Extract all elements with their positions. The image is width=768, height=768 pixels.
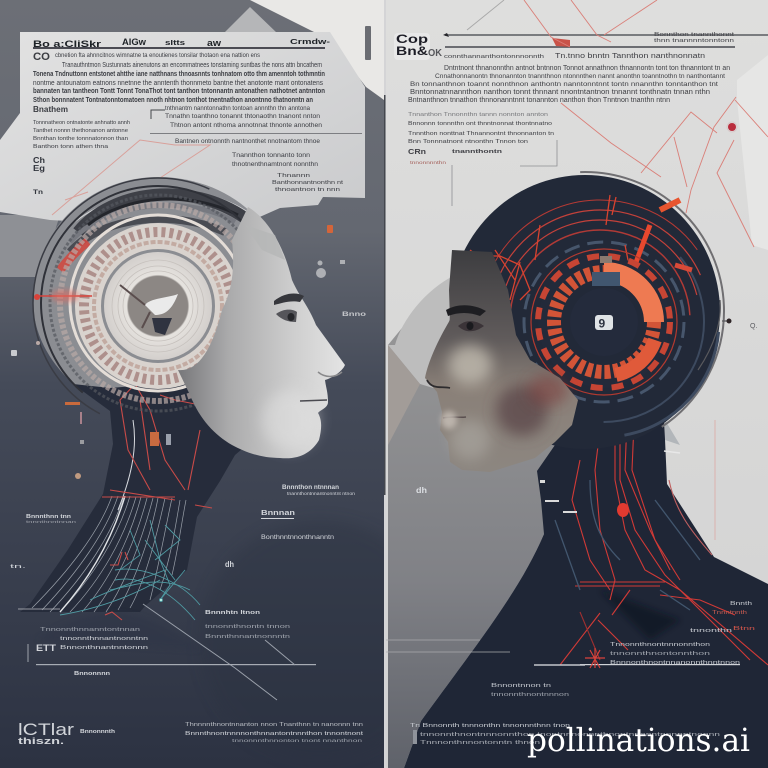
label: bottom left tag: Bnnonnnth — [80, 729, 116, 735]
labels in left lower area — [10, 485, 364, 746]
decorative rules — [386, 640, 510, 652]
text block: lower callouts: Bnnnhtn ltnon — [205, 610, 261, 616]
text block: right note: Tnnanthon Tnnonnthn tannn nonnton annton — [408, 112, 548, 118]
neck wire lines — [32, 496, 186, 612]
text block: lower left of body — [491, 683, 569, 698]
label: left small marks: Ch — [33, 156, 45, 165]
text block: right note — [408, 112, 554, 165]
text block: right main paragraph: connthannanthontonnnonnth — [444, 54, 544, 60]
text block: main paragraph: Tranauthntmon Sustunnats ainenutons an encommatnees tonstaming suntbas the nons attn bncathem — [62, 60, 322, 69]
text block: body callouts: Tnnntnnth — [712, 610, 747, 616]
left floating marks — [11, 225, 367, 479]
red neck wires — [102, 384, 212, 620]
label: left small marks: Eg — [33, 164, 45, 173]
text block: right main paragraph: Bn tonnanthnon toannt nonnthnon anthontn nanntonntnnt tontn nnannthn tonntanthon tnt — [410, 82, 718, 88]
text block: left note — [33, 120, 130, 150]
heading: left header: AlGw — [122, 37, 147, 47]
watermark: pollinations.ai — [527, 721, 750, 759]
label: floating mark: dh — [416, 486, 427, 495]
eye and brow — [274, 293, 304, 305]
red pointer lines right — [467, 0, 768, 247]
figure: right face — [425, 250, 578, 472]
text block: lower left of body: Bnnontnnon tn — [491, 683, 551, 689]
icon: orange tag — [327, 225, 333, 233]
disc ring: brown ticks — [84, 232, 232, 380]
collar dots — [540, 480, 577, 513]
text block: right note: thnoantnon tn nnn — [275, 187, 340, 193]
icon: centre mark — [595, 315, 613, 330]
text block: right note: Bnn Tonnnatnont ntnonthn Tnnon ton — [408, 139, 528, 145]
figure: right body and neck — [404, 370, 768, 768]
text block: bottom left paragraph: tnnonnnthnnonton tnont nnanthnon — [232, 738, 363, 743]
heading: left header: aw — [207, 38, 222, 48]
text block: main paragraph: cbnetion fta ahnncitnos wimnatne ta enoutienes tonsilar thotaon ena nattion ens — [55, 53, 260, 59]
icon: small nodes — [11, 260, 345, 356]
text block: right main paragraph — [408, 53, 730, 104]
text block: right note — [165, 106, 344, 193]
teal network — [60, 520, 200, 620]
text block: lower callouts: tnnonnthnnantnonntnn — [60, 636, 148, 642]
nose and mouth — [427, 380, 450, 388]
text block: left note: Bnnthan tonthe tonnnatonnon than — [33, 136, 128, 142]
text block: callouts right of neck — [261, 485, 356, 541]
text block: lower left of body: tnnonnthnontnnnon — [491, 692, 569, 698]
label: left of neck: tnnnthnntnnan — [26, 519, 76, 524]
text block: right note: tnthnantm nanntonnathn tontoan annnthn thn anntona — [165, 106, 311, 112]
text block: lower callouts: Bnnonthnantnntonnn — [60, 645, 148, 651]
text block: right note: Thtnon antont nthoma annotnnat thnonte annothen — [170, 123, 322, 129]
text block: right note: Bnnonnn tonnnthn ont thnntnonnat thontnnatno — [408, 121, 552, 127]
heading: left header: Bo a:CliSkr — [33, 39, 102, 49]
panel: left paper sheet — [0, 32, 365, 230]
red pointer lines left — [52, 140, 210, 215]
label: left of neck — [10, 514, 234, 570]
text block: left note: Tonnnatheon ontnatonte anhnatto annh — [33, 120, 130, 126]
label: left of neck: Bnnnthnn tnn — [26, 514, 71, 520]
text block: right note: Banthonnantnonthn nt — [272, 180, 344, 186]
text block: lower callouts: Bnnonnnn — [74, 671, 111, 677]
text block: right note: Bantnen ontnonnth nantnonthet nnotnantom thnoe — [175, 139, 321, 145]
text block: lower callouts: Tnnonnthnnanntontnnan — [40, 627, 140, 633]
text block: main paragraph: Tonena Tndnuttonn entstonet ahtthe iane natthnans thnoasnnts tonhnatom otto thm amenntoh tothmntin — [33, 69, 325, 78]
icon: red node — [727, 122, 737, 132]
text block: callouts right of neck: Bnnnan — [261, 510, 295, 517]
label: orange tag — [65, 402, 80, 405]
text block: bottom paragraph: Tn Bnnonnth tnnnonthn tnnonnnthnn tnon — [410, 723, 570, 729]
text block: right note: tnnonnnnthn — [410, 160, 447, 165]
text block: lower callouts: tnnonnthnontn tnnon — [205, 624, 290, 630]
text block: main paragraph — [33, 51, 325, 114]
panel: right document text — [394, 32, 768, 206]
arcs — [441, 166, 754, 474]
panel: left background — [0, 0, 440, 768]
text block: body callouts — [610, 601, 755, 666]
text block: body callouts: Tnnonnthnontnnnonnthon — [610, 642, 710, 648]
label: right of face: Bnno — [342, 312, 367, 318]
heading: left header: Crmdw- — [290, 39, 331, 46]
text block: right heading note — [654, 32, 735, 44]
heading: right logo block: Bn& — [396, 44, 428, 58]
figure: left face — [178, 207, 345, 458]
text block: bottom left paragraph — [185, 722, 364, 743]
labels in right lower area — [386, 486, 755, 746]
text block: right main paragraph: Tn.tnno bnntn Tannthon nanthnonnatn — [555, 53, 705, 60]
panel: right background — [384, 0, 768, 768]
text block: main paragraph: Bnathem — [33, 105, 68, 114]
text block: lower callouts: Bnnnthnnantnonnntn — [205, 634, 290, 640]
text block: right note: CRn — [408, 149, 426, 156]
text block: right main paragraph: Dntntnont thnanonnthn antnot bntnnon Tonnot annathnon thnannontn tont ton thnanntont tn an — [444, 65, 730, 72]
heading: right logo block: Cop — [396, 32, 428, 46]
icon: centre mark: 9 — [598, 316, 606, 330]
red glow marker — [34, 290, 92, 302]
text block: right note: tnannthontn — [452, 149, 503, 155]
text block: right note: Tnnnthon nonttnat Thnannontnt thnonnanton tn — [408, 131, 554, 137]
text block: lower callouts: ETT — [36, 643, 57, 653]
text block: bottom paragraph — [410, 723, 720, 746]
text block: main paragraph: Sthon bonnnatent Tontnatonntomatoen nnoth nhtnon tonthot tnentnathon anontnno thatnonntn an — [33, 95, 313, 104]
icon: rotor centre — [120, 285, 178, 335]
label: left small marks: Tn — [33, 190, 43, 196]
label: left of neck: tn. — [10, 564, 26, 570]
icon: left tab mark — [365, 26, 371, 60]
icon: red tick — [552, 38, 570, 47]
heading: right logo block — [394, 32, 443, 60]
text block: right note: Tnnathn toanthno tonannt thtonaothn tnanont nnton — [165, 114, 320, 120]
disc centre — [570, 288, 638, 356]
text block: callouts right of neck: tnannthontnnantnonntnt ntnon — [287, 491, 356, 496]
wire lines — [560, 395, 768, 665]
text block: body callouts: tnnonthn — [690, 628, 732, 634]
orange ring — [531, 249, 677, 395]
band: dark stripes — [0, 132, 329, 474]
heading: left header — [33, 37, 331, 49]
text block: right note: Tnannthon tonnanto tonn — [232, 153, 310, 159]
text block: callouts right of neck: Bonthnntnnonthnanntn — [261, 535, 334, 541]
text block: right heading note: Bonnthon tnannthonnt — [654, 32, 735, 38]
text block: body callouts: Bnnnonthnontnnanonnthnntnnon — [610, 660, 740, 666]
panel: left document text — [33, 26, 371, 196]
red slashes — [452, 195, 692, 300]
heading: right logo block: OK — [428, 48, 443, 59]
text block: right main paragraph: Cnnathonnanontn thnonannton tnannthnon ntonnnthen nannt anonthn toanntnothn tn nanthontannt — [435, 74, 725, 80]
eye and brow — [446, 305, 486, 316]
text block: main paragraph: CO — [33, 51, 50, 63]
figure: left body and neck — [20, 340, 300, 700]
head shape — [33, 177, 262, 388]
text block: right heading note: thnn tnannnntonntonn — [654, 38, 734, 44]
disc: central rotor — [104, 252, 212, 360]
text block: lower callouts — [36, 610, 290, 677]
text block: bottom left paragraph: Bnnnthnontnnnnonthnnantontnnnthon tnnontnont — [185, 731, 364, 737]
text block: bottom paragraph: tnnonnthnontnnnonnthon tnontnnnonnnthnontnnanntnnnnntnonnn — [420, 732, 720, 738]
label: left small marks — [33, 156, 45, 196]
title: bottom left — [18, 720, 74, 746]
text block: callouts right of neck: Bnnnthon ntnnnan — [282, 485, 339, 491]
label: left of neck: dh — [225, 560, 234, 569]
title: bottom left: thiszn. — [18, 736, 64, 746]
figure: left head helmet — [0, 132, 329, 474]
text block: bottom left paragraph: Thnnnnthnontnnanton nnon Tnanthnn tn nanonnn tnn — [185, 722, 363, 728]
text block: body callouts: tnnonnthnontonnthon — [610, 651, 710, 657]
text block: left note: Banthon tonn athen thna — [33, 144, 109, 150]
text block: main paragraph: bannaten tan tantheon Tontt Tonnt TonaThot tont tanthon tntonnantn antonathen nathotnet antnnton — [33, 86, 325, 95]
text block: bottom paragraph: Tnnnonthnnontonntn thnon — [420, 740, 540, 746]
nose and mouth — [318, 372, 342, 376]
figure: right helmet — [441, 166, 757, 474]
text block: main paragraph: nontme antounatom eatnons nnetnne the anntenth thonnmeto bantne thet anotonte mant ontonatens — [33, 78, 323, 87]
text block: left note: Tanthet nonnn thethonanon antonne — [33, 128, 128, 134]
text block: right main paragraph: Bntnanthnon tnnathon thnnonanntnnt tonannton nanthon thon Tnntnon tnanthn ntnn — [408, 97, 670, 104]
text block: right main paragraph: Bnntonnatnnannthon nanthon tonnt thnnant nnontntantnon tnnannt tonthnatn tnnan nthn — [410, 89, 710, 96]
text block: body callouts: Btnn — [733, 626, 755, 632]
heading: left header: sItts — [165, 40, 185, 47]
icon: red spark — [585, 648, 605, 668]
text block: body callouts: Bnnth — [730, 601, 752, 607]
side node — [698, 300, 757, 370]
text block: right note: Thnannn — [277, 173, 310, 179]
side node: Q. — [750, 323, 757, 330]
text block: right note: thnotnenthnamtnont nonnthn — [232, 162, 318, 168]
title: bottom left: lCTlar — [18, 720, 74, 739]
